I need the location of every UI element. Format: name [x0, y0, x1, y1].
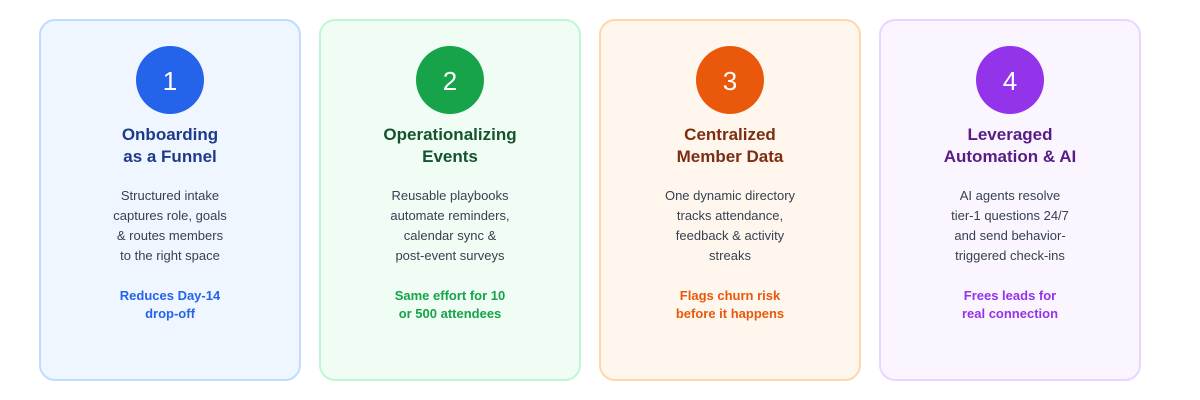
- description: automation: and send behavior-: [954, 228, 1066, 243]
- number badge 4: [976, 46, 1044, 114]
- key benefit: onboarding: [120, 288, 220, 321]
- key benefit: onboarding: Reduces Day-14: [120, 288, 220, 303]
- heading: events: Operationalizing: [383, 125, 517, 144]
- description: onboarding: Structured intake: [121, 188, 219, 203]
- key benefit: automation: real connection: [962, 306, 1058, 321]
- description: events: automate reminders,: [390, 208, 510, 223]
- number badge 3: [696, 46, 764, 114]
- heading: onboarding: [122, 125, 218, 166]
- heading: automation: Automation & AI: [944, 147, 1076, 166]
- description: member data: streaks: [709, 248, 751, 263]
- key benefit: events: or 500 attendees: [399, 306, 501, 321]
- description: onboarding: & routes members: [117, 228, 223, 243]
- description: events: calendar sync &: [404, 228, 496, 243]
- description: member data: tracks attendance,: [677, 208, 783, 223]
- description: onboarding: captures role, goals: [113, 208, 227, 223]
- panel: step 3 member data: [599, 19, 861, 381]
- heading: automation: Leveraged: [967, 125, 1053, 144]
- description: onboarding: to the right space: [120, 248, 220, 263]
- heading: member data: [677, 125, 784, 166]
- panel: step 4 automation: [879, 19, 1141, 381]
- panel: step 1 onboarding: [39, 19, 301, 381]
- key benefit: events: Same effort for 10: [395, 288, 505, 303]
- key benefit: automation: [962, 288, 1058, 321]
- key benefit: onboarding: drop-off: [145, 306, 195, 321]
- key benefit: automation: Frees leads for: [964, 288, 1056, 303]
- key benefit: member data: [676, 288, 784, 321]
- panel: step 2 events: [319, 19, 581, 381]
- heading: events: [383, 125, 517, 166]
- description: automation: [951, 188, 1069, 263]
- number badge 4: 4: [1003, 66, 1017, 96]
- key benefit: member data: Flags churn risk: [680, 288, 780, 303]
- heading: onboarding: Onboarding: [122, 125, 218, 144]
- description: onboarding: [113, 188, 227, 263]
- key benefit: events: [395, 288, 505, 321]
- description: member data: feedback & activity: [676, 228, 784, 243]
- heading: member data: Member Data: [677, 147, 783, 166]
- number badge 2: [416, 46, 484, 114]
- description: automation: AI agents resolve: [960, 188, 1060, 203]
- description: events: [390, 188, 510, 263]
- heading: events: Events: [422, 147, 478, 166]
- description: events: Reusable playbooks: [391, 188, 509, 203]
- key benefit: member data: before it happens: [676, 306, 784, 321]
- heading: automation: [944, 125, 1076, 166]
- heading: member data: Centralized: [684, 125, 776, 144]
- number badge 2: 2: [443, 66, 457, 96]
- description: automation: tier-1 questions 24/7: [951, 208, 1069, 223]
- description: events: post-event surveys: [395, 248, 505, 263]
- number badge 1: [136, 46, 204, 114]
- description: member data: One dynamic directory: [665, 188, 795, 203]
- heading: onboarding: as a Funnel: [123, 147, 217, 166]
- description: member data: [665, 188, 795, 263]
- number badge 3: 3: [723, 66, 737, 96]
- number badge 1: 1: [163, 66, 177, 96]
- description: automation: triggered check-ins: [955, 248, 1065, 263]
